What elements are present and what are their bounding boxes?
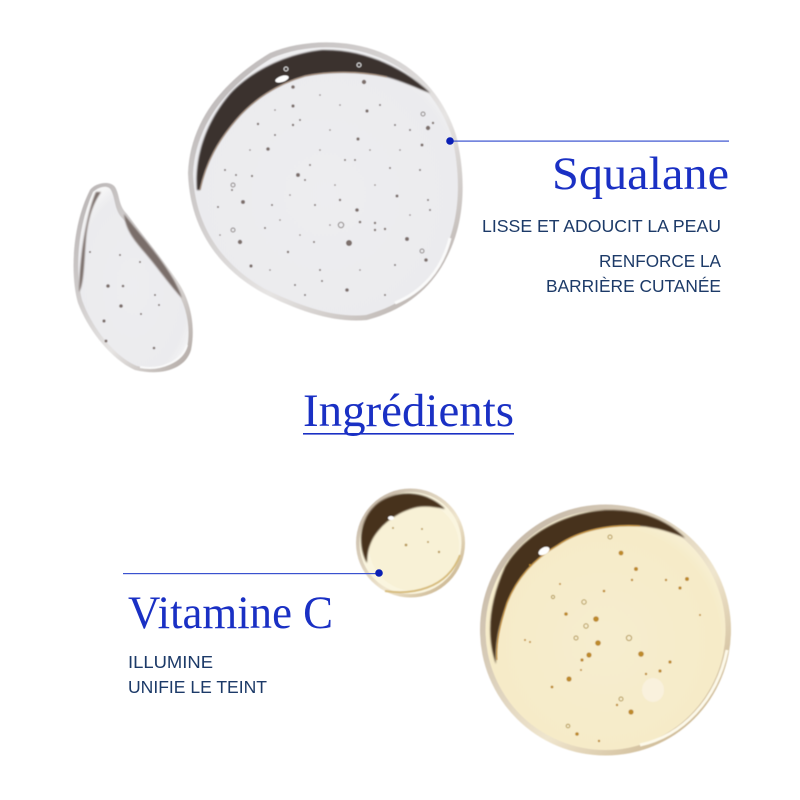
dark edge bands — [79, 192, 101, 292]
heading: Vitamine C: Vitamine C — [128, 587, 333, 639]
bubbles — [217, 80, 434, 296]
droplet: small squalane teardrop — [74, 183, 193, 372]
text: Vitamine C benefits: UNIFIE LE TEINT — [128, 677, 267, 697]
text: Squalane benefits: LISSE ET ADOUCIT LA PEAU — [482, 216, 721, 236]
dark crescent — [197, 50, 430, 190]
dark crescent — [490, 510, 685, 664]
text: Vitamine C benefits: ILLUMINE — [128, 652, 213, 672]
dark crescent — [361, 494, 445, 563]
text: Squalane benefits: BARRIÈRE CUTANÉE — [546, 276, 721, 296]
callout: vitamin C leader line — [123, 569, 383, 577]
droplet: large vitamin C — [480, 504, 731, 756]
bubbles — [524, 551, 701, 742]
highlight — [274, 74, 290, 84]
droplet: large squalane — [188, 42, 463, 320]
bubbles — [89, 251, 160, 349]
droplet: small vitamin C — [356, 488, 465, 598]
text: Squalane benefits: RENFORCE LA — [599, 251, 721, 271]
text: Squalane benefits — [482, 216, 721, 296]
text: Vitamine C benefits — [128, 652, 267, 697]
callout: squalane leader line — [446, 137, 729, 145]
main title: Ingrédients: Ingrédients — [303, 385, 514, 437]
heading: Squalane: Squalane — [552, 148, 729, 200]
